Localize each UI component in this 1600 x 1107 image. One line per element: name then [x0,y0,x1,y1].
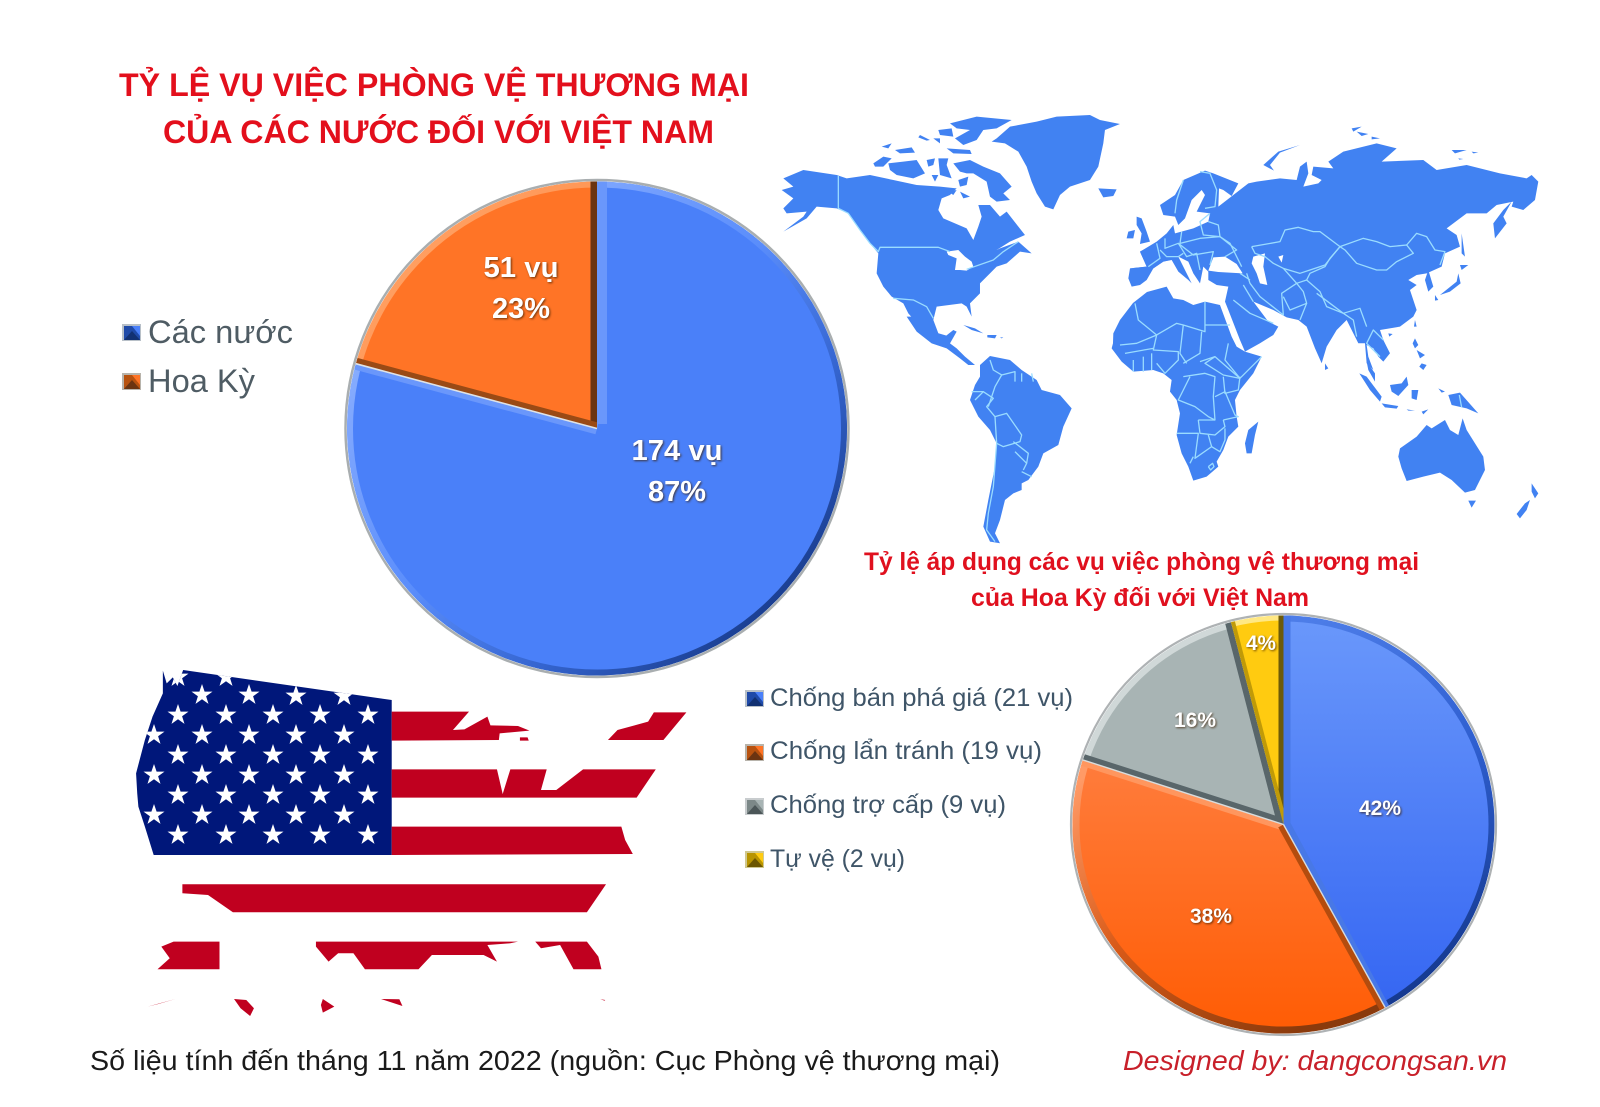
label: các nước: 174 vụ [632,435,722,467]
slice: hoa kỳ 23% [356,182,597,428]
subtitle: second pie [864,548,1419,612]
pie rim shadow [346,180,848,677]
title: CỦA CÁC NƯỚC ĐỐI VỚI VIỆT NAM [163,114,714,150]
legend item: chống lẩn tránh: Chống lẩn tránh (19 vụ) [770,737,1042,765]
map: north america and arctic [782,115,1150,342]
label: hoa kỳ [484,252,558,325]
slice dividers [1083,760,1385,1008]
label: 38%: 38% [1190,905,1232,928]
legend item: chống trợ cấp: Chống trợ cấp (9 vụ) [770,791,1006,819]
second pie chart [1071,614,1496,1035]
slice divider [356,364,597,428]
world map [782,115,1538,543]
source note: Số liệu tính đến tháng 11 năm 2022 (nguồn: Cục Phòng vệ thương mại) [90,1045,1000,1076]
title [119,67,749,150]
slice: chống trợ cấp 16% [1082,622,1284,824]
main pie chart [346,180,848,677]
map of usa in flag pattern [136,666,686,1016]
map: eurasia [1128,127,1538,370]
label: 42%: 42% [1359,797,1401,820]
slice: tự vệ 4% [1231,616,1284,824]
red stripes [148,712,686,1016]
label: hoa kỳ: 51 vụ [484,252,558,284]
title: TỶ LỆ VỤ VIỆC PHÒNG VỆ THƯƠNG MẠI [119,67,749,103]
legend item: các nước: Các nước [148,314,293,350]
legend item: hoa kỳ: Hoa Kỳ [148,363,255,399]
map: central america south america africa [907,287,1262,543]
subtitle: second pie: của Hoa Kỳ đối với Việt Nam [971,584,1309,612]
slice: các nước 87% [347,181,847,676]
pie rim shadow [1071,614,1496,1035]
label: các nước: 87% [648,476,706,508]
subtitle: second pie: Tỷ lệ áp dụng các vụ việc phòng vệ thương mại [864,548,1419,576]
designer credit: Designed by: dangcongsan.vn [1123,1045,1507,1076]
map: southeast asia and oceania [1325,333,1538,518]
legend item: tự vệ: Tự vệ (2 vụ) [770,845,905,873]
flag canton [136,670,392,855]
label: hoa kỳ: 23% [492,293,550,325]
legend item: chống bán phá giá: Chống bán phá giá (21 vụ) [770,684,1073,712]
legend: second pie [745,684,1073,873]
legend: main pie [122,314,293,399]
label: 4%: 4% [1246,632,1276,655]
label: các nước [632,435,722,508]
slice: chống lẩn tránh 38% [1072,760,1386,1034]
label: 16%: 16% [1174,709,1216,732]
slice: chống bán phá giá 42% [1284,616,1494,1008]
flag stars [144,666,378,844]
